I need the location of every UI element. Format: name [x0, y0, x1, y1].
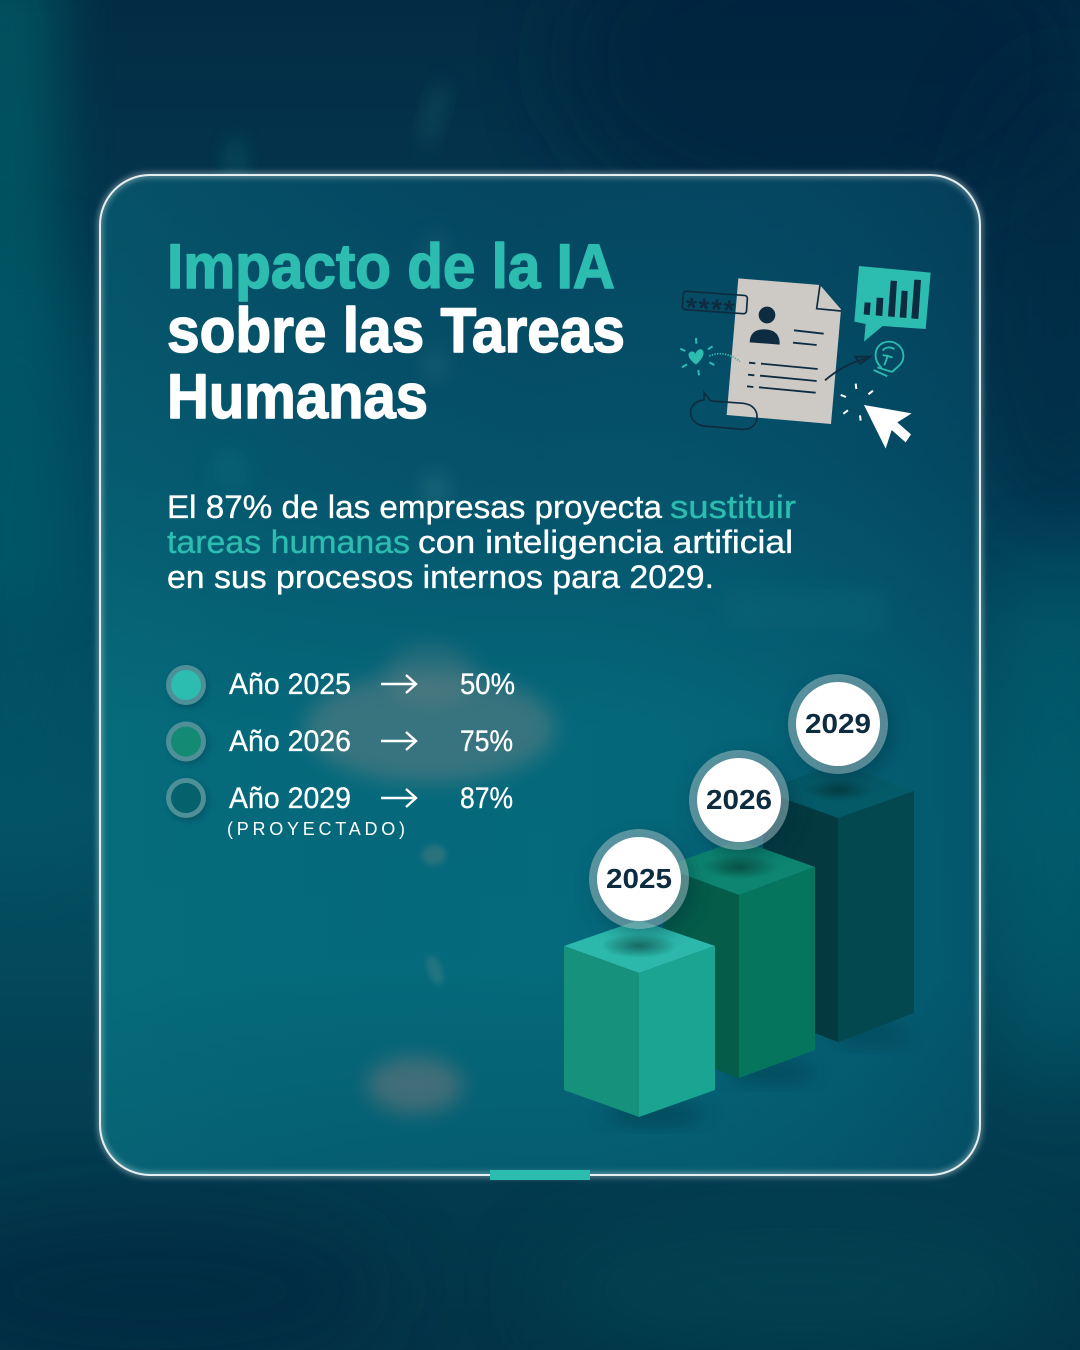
body text: El 87% de las empresas proyecta [167, 489, 662, 525]
lightbulb [874, 342, 903, 376]
legend row: 2026: 75% [460, 725, 513, 758]
bottom accent tab [490, 1170, 590, 1180]
legend row: 2025 [166, 665, 515, 708]
body text: con inteligencia artificial [418, 524, 793, 560]
sheet [727, 278, 841, 424]
body text: en sus procesos internos para 2029. [167, 559, 714, 595]
legend row: 2029 [166, 778, 513, 839]
icon: document illustration: **** [685, 292, 735, 326]
body text: sustituir [670, 489, 796, 525]
label: 2029 [788, 674, 893, 781]
legend row: 2029: Año 2029 [229, 782, 351, 815]
bar: 2029 [763, 763, 914, 1044]
title: sobre las Tareas [167, 296, 625, 366]
legend row: 2025: Año 2025 [229, 668, 351, 701]
legend row: 2029: 87% [460, 782, 513, 815]
label: 2025 [589, 829, 694, 936]
panel: glass card [100, 175, 980, 1175]
bar: 2025 [564, 920, 715, 1124]
legend row: 2029: (PROYECTADO) [227, 819, 405, 839]
cursor [864, 405, 912, 449]
legend row: 2025: 50% [460, 668, 515, 701]
bar: 2026 [663, 840, 815, 1082]
heart with rays [689, 349, 704, 365]
label: 2026 [689, 750, 794, 857]
title: Humanas [167, 362, 428, 432]
label: 2029: 2029 [805, 708, 871, 739]
comment bubble [691, 393, 757, 429]
legend row: 2026: Año 2026 [229, 725, 351, 758]
label: 2026: 2026 [706, 784, 772, 815]
label: 2025: 2025 [606, 863, 672, 894]
title [167, 232, 625, 432]
body text [167, 489, 796, 595]
arrow [825, 358, 866, 380]
legend row: 2026 [166, 722, 513, 764]
chart bubble [854, 266, 931, 342]
legend [166, 665, 515, 839]
icon: document illustration [680, 266, 931, 449]
title: Impacto de la IA [167, 232, 615, 302]
body text: tareas humanas [167, 524, 410, 560]
